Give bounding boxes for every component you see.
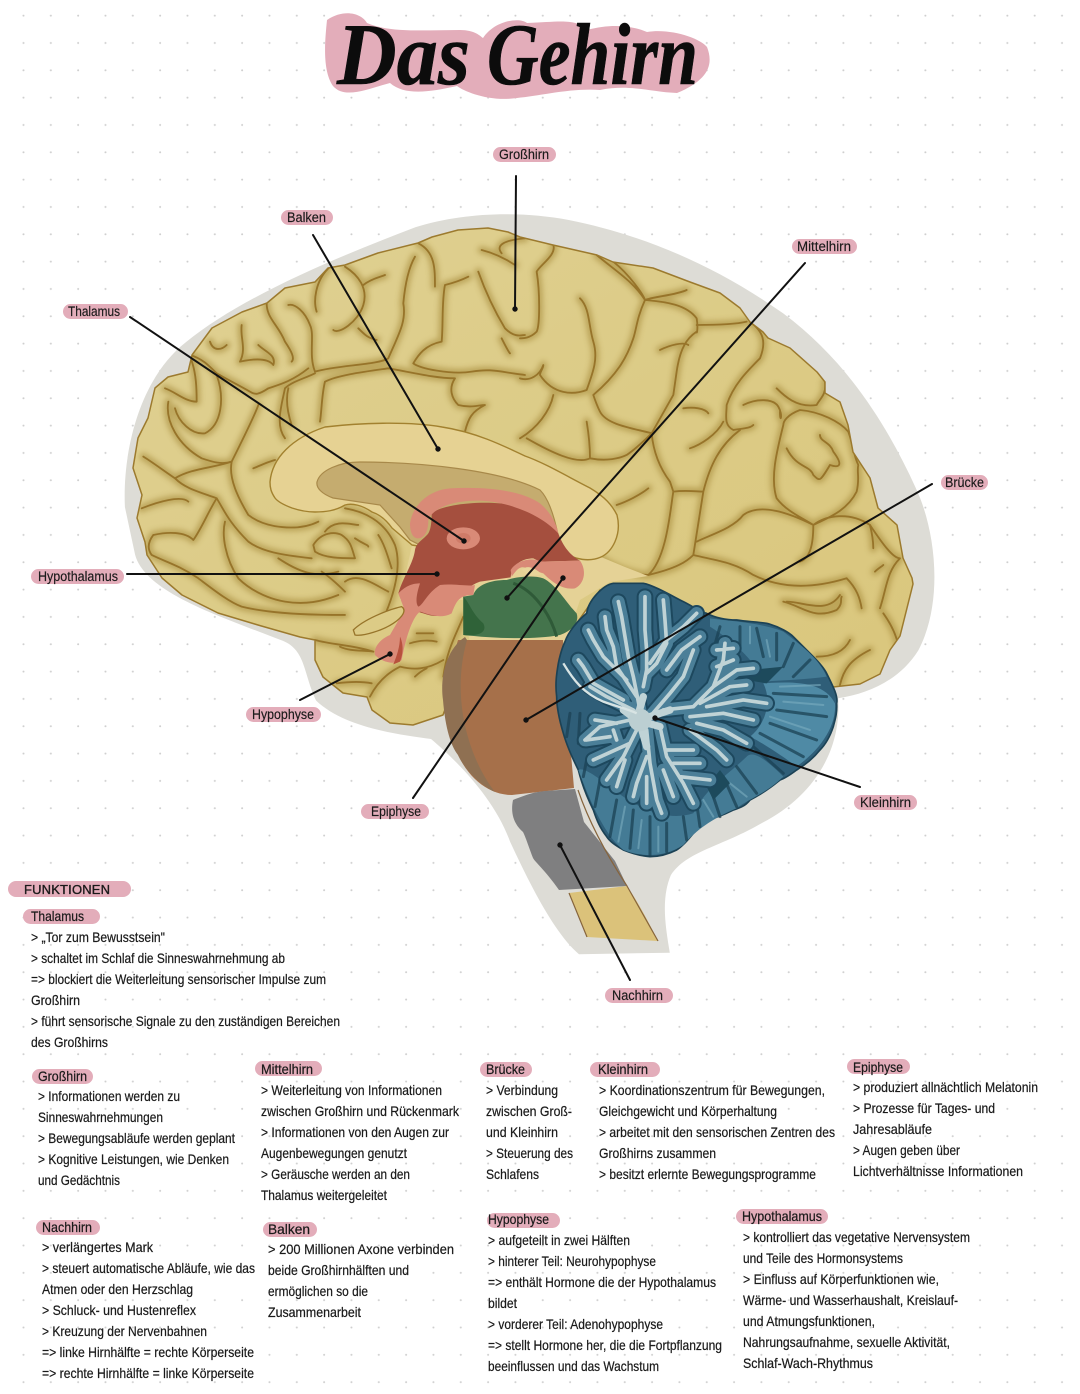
text block: Schlaf-Wach-Rhythmus [743,1355,873,1371]
text block: > besitzt erlernte Bewegungsprogramme [599,1166,816,1182]
text block [31,929,340,1050]
line: Epiphyse [413,576,565,798]
text block: > Koordinationszentrum für Bewegungen, [599,1082,825,1098]
cerebellum [556,583,837,857]
text block: und Teile des Hormonsystems [743,1250,903,1266]
text block: Gleichgewicht und Körperhaltung [599,1103,777,1119]
text block: zwischen Großhirn und Rückenmark [261,1103,460,1119]
title: Gehirn [487,7,698,104]
text block: => blockiert die Weiterleitung sensorischer Impulse zum [31,971,326,987]
text block: > produziert allnächtlich Melatonin [853,1079,1038,1095]
text block: Augenbewegungen genutzt [261,1145,407,1161]
text block: beide Großhirnhälften und [268,1262,409,1278]
panel: Mittelhirn [255,1061,460,1203]
text block: Jahresabläufe [853,1121,932,1137]
text block: Schlafens [486,1166,539,1182]
text block [38,1088,235,1188]
text block [743,1229,970,1371]
heading: Hypothalamus: Hypothalamus [742,1208,822,1224]
label: Epiphyse: Epiphyse [371,804,421,819]
stem edge lines [569,790,658,941]
text block [486,1082,573,1182]
text block: => enthält Hormone die der Hypothalamus [488,1274,716,1290]
diagram labels [31,147,988,1003]
heading: Thalamus: Thalamus [31,908,84,924]
line: Balken [313,235,440,451]
text block: > Verbindung [486,1082,558,1098]
label: Großhirn: Großhirn [499,147,549,162]
panel: Balken [263,1221,454,1320]
text block: > hinterer Teil: Neurohypophyse [488,1253,656,1269]
paper cut-out silhouette [125,214,934,954]
text block: Großhirns zusammen [599,1145,716,1161]
text block: > Steuerung des [486,1145,573,1161]
line: Nachhirn [558,843,630,980]
heading: Epiphyse: Epiphyse [853,1059,903,1075]
brainstem pons [442,637,574,795]
text block: > Informationen werden zu [38,1088,180,1104]
midbrain [463,577,577,638]
hypothalamus dark area [398,503,580,616]
heading: Mittelhirn: Mittelhirn [261,1061,313,1077]
light outer fan [750,682,835,767]
line: Thalamus [130,317,466,543]
text block: > Geräusche werden an den [261,1166,410,1182]
text block [42,1239,255,1381]
corpus callosum (Balken) [270,423,648,645]
panel: Brücke [480,1061,573,1182]
thalamus and hypothalamus [353,488,584,664]
panel: Hypophyse [487,1211,722,1374]
text block: > Schluck- und Hustenreflex [42,1302,196,1318]
pineal gland [511,559,584,589]
text block: > Weiterleitung von Informationen [261,1082,442,1098]
optic fold [353,607,404,635]
text block: > Prozesse für Tages- und [853,1100,995,1116]
text block [853,1079,1038,1179]
heading: Kleinhirn: Kleinhirn [598,1061,648,1077]
text block: Nahrungsaufnahme, sexuelle Aktivität, [743,1334,950,1350]
leader lines [127,176,932,980]
text block: => linke Hirnhälfte = rechte Körperseite [42,1344,254,1360]
panel: Thalamus [23,908,340,1050]
text block: > Bewegungsabläufe werden geplant [38,1130,235,1146]
label: Mittelhirn: Mittelhirn [797,239,851,254]
text block: Lichtverhältnisse Informationen [853,1163,1023,1179]
cerebrum [133,228,913,725]
line: Hypothalamus [127,572,439,576]
text block [599,1082,835,1182]
text block: Wärme- und Wasserhaushalt, Kreislauf- [743,1292,958,1308]
text block: > Einfluss auf Körperfunktionen wie, [743,1271,939,1287]
text block: Thalamus weitergeleitet [261,1187,387,1203]
text block [268,1241,454,1320]
label: Kleinhirn: Kleinhirn [860,795,911,810]
panel: Kleinhirn [590,1061,835,1182]
heading: Großhirn: Großhirn [38,1068,87,1084]
title: Das [336,7,470,104]
medulla [512,789,627,890]
text block: => rechte Hirnhälfte = linke Körperseite [42,1365,254,1381]
spinal cord [569,886,658,941]
folia lobes with white matter [563,597,767,813]
heading: Balken: Balken [268,1221,310,1237]
text block: und Kleinhirn [486,1124,558,1140]
text block: des Großhirns [31,1034,108,1050]
text block: > 200 Millionen Axone verbinden [268,1241,454,1257]
heading: Funktionen: FUNKTIONEN [24,882,110,897]
label: Thalamus: Thalamus [68,304,120,319]
heading: Brücke: Brücke [486,1061,525,1077]
label: Nachhirn: Nachhirn [612,988,663,1003]
text block: bildet [488,1295,517,1311]
text block: > aufgeteilt in zwei Hälften [488,1232,630,1248]
text block: > Informationen von den Augen zur [261,1124,449,1140]
text block: > „Tor zum Bewusstsein" [31,929,165,945]
text block: > arbeitet mit den sensorischen Zentren des [599,1124,835,1140]
hypophysis stalk [375,583,475,663]
text block: Zusammenarbeit [268,1304,361,1320]
panel: Hypothalamus [736,1208,970,1371]
ventricle space [317,462,558,545]
label: Hypothalamus: Hypothalamus [38,569,118,584]
text block: > schaltet im Schlaf die Sinneswahrnehmung ab [31,950,285,966]
label: Balken: Balken [287,210,326,225]
text block [261,1082,460,1203]
label: Brücke: Brücke [945,475,984,490]
thalamus crescent [410,488,558,538]
text block: und Gedächtnis [38,1172,120,1188]
brain illustration [125,214,934,954]
line: Hypophyse [300,652,392,700]
heading: Nachhirn: Nachhirn [42,1219,92,1235]
text block: und Atmungsfunktionen, [743,1313,875,1329]
text block: > steuert automatische Abläufe, wie das [42,1260,255,1276]
line: Großhirn [513,176,517,311]
text block: => stellt Hormone her, die die Fortpflanzung [488,1337,722,1353]
text block: beeinflussen und das Wachstum [488,1358,659,1374]
panel: Nachhirn [36,1219,255,1381]
text block: > Kognitive Leistungen, wie Denken [38,1151,229,1167]
text block: Großhirn [31,992,80,1008]
text block: > Augen geben über [853,1142,960,1158]
text block: > kontrolliert das vegetative Nervensystem [743,1229,970,1245]
text block: Atmen oder den Herzschlag [42,1281,193,1297]
text block: zwischen Groß- [486,1103,572,1119]
label: Hypophyse: Hypophyse [252,707,314,722]
thalamus core [447,527,480,549]
text block: ermöglichen so die [268,1283,368,1299]
line: Kleinhirn [653,716,860,787]
heading: Hypophyse: Hypophyse [488,1211,549,1227]
text block: Sinneswahrnehmungen [38,1109,163,1125]
text block: > verlängertes Mark [42,1239,154,1255]
line: Brücke [524,484,932,722]
heading: Funktionen [8,881,131,897]
panel: Großhirn [32,1068,235,1188]
text block: > Kreuzung der Nervenbahnen [42,1323,207,1339]
folia stripes [567,627,827,855]
text block: > vorderer Teil: Adenohypophyse [488,1316,663,1332]
panel: Epiphyse [847,1059,1038,1179]
title [325,7,710,104]
text block [488,1232,722,1374]
text block: > führt sensorische Signale zu den zuständigen Bereichen [31,1013,340,1029]
line: Mittelhirn [505,263,805,600]
